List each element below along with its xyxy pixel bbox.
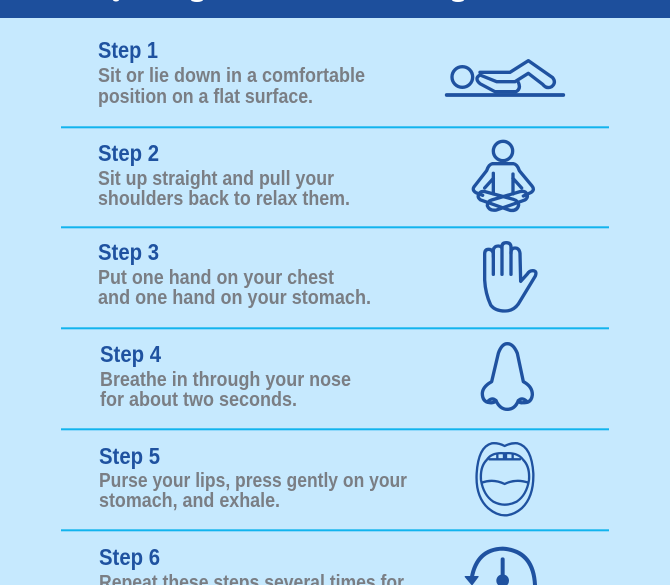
icon: clock with arrow (465, 549, 535, 585)
header banner (0, 0, 670, 18)
step 2 text (98, 140, 350, 210)
step 1 text: Sit or lie down in a comfortable (98, 65, 365, 87)
step 4 text: Breathe in through your nose (100, 369, 351, 391)
step 3 text: and one hand on your stomach. (98, 287, 371, 309)
step 5 text: stomach, and exhale. (99, 490, 280, 512)
icon: nose (482, 344, 532, 409)
step 4 text: for about two seconds. (100, 389, 297, 411)
step 5 text (99, 443, 407, 512)
step 4 text: Step 4 (100, 341, 161, 367)
step 6 text: Step 6 (99, 544, 160, 570)
step 4 text (100, 341, 351, 411)
step 3 text: Put one hand on your chest (98, 267, 334, 289)
step 1 text (98, 37, 365, 108)
step 2 text: Sit up straight and pull your (98, 168, 334, 190)
step 3 text: Step 3 (98, 239, 159, 265)
step 6 text (99, 544, 404, 585)
icon: hand (485, 243, 536, 311)
step 2 text: shoulders back to relax them. (98, 188, 350, 210)
icon: open mouth (477, 443, 533, 515)
step 5 text: Purse your lips, press gently on your (99, 470, 407, 492)
step 1 text: position on a flat surface. (98, 86, 313, 108)
icon: person lying down (447, 61, 563, 95)
icon: meditating person (473, 141, 533, 210)
step 2 text: Step 2 (98, 140, 159, 166)
step 1 text: Step 1 (98, 37, 158, 63)
step 3 text (98, 239, 371, 309)
step 5 text: Step 5 (99, 443, 160, 469)
